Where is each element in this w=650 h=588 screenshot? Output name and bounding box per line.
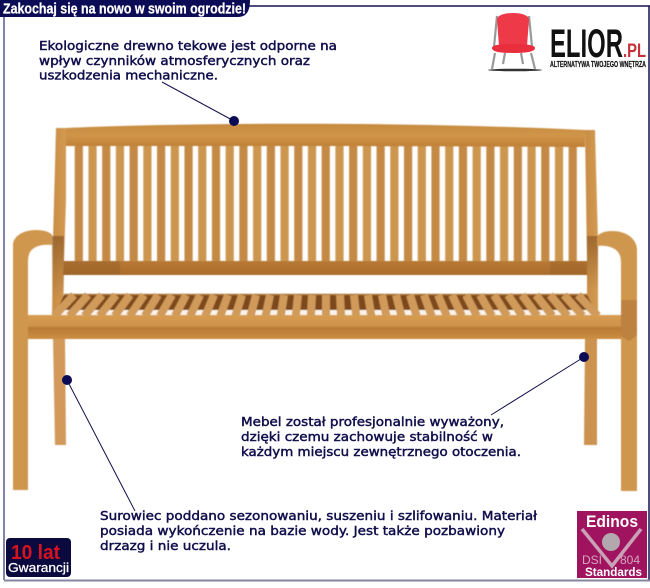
front seat rail [27, 315, 623, 339]
shadows beneath the arms [52, 236, 598, 300]
lower back rail [63, 261, 587, 275]
warranty label: Gwarancji [8, 561, 69, 575]
marker dot [579, 352, 589, 362]
right front leg shading [621, 300, 637, 341]
right arm and front leg [597, 231, 637, 491]
bench back legs [53, 338, 597, 445]
seat slats [54, 294, 598, 316]
badge: 10 years warranty [6, 538, 71, 577]
warranty years: 10 lat [11, 542, 60, 564]
top back rail [66, 124, 585, 147]
callout text: posiada wykończenie na bazie wody. Jest także pozbawiony [100, 523, 506, 538]
callout text: Mebel został profesjonalnie wyważony, [241, 414, 504, 429]
Standards label: Standards [585, 565, 642, 579]
callout text: Surowiec poddano sezonowaniu, suszeniu i szlifowaniu. Materiał [100, 508, 537, 523]
callout text: dzięki czemu zachowuje stabilność w [241, 429, 493, 444]
callout: material [62, 375, 537, 553]
leader line [67, 380, 135, 511]
DSI label: DSI [582, 553, 602, 567]
marker dot [62, 375, 72, 385]
bench illustration [13, 124, 637, 491]
logo: Elior.pl [488, 13, 646, 71]
left arm and front leg [13, 230, 52, 490]
marker dot [229, 116, 239, 126]
back slats [74, 145, 578, 263]
leader line [491, 357, 584, 415]
804 label: 804 [620, 553, 640, 567]
Edinos name: Edinos [586, 512, 638, 531]
badge: Edinos standards [577, 511, 647, 579]
callout: balance [241, 352, 589, 459]
callout text: Ekologiczne drewno tekowe jest odporne na [39, 38, 337, 53]
icon: red chair [488, 13, 542, 71]
back posts [52, 128, 598, 320]
callout text: uszkodzenia mechaniczne. [39, 68, 218, 82]
V mark with circle [582, 529, 641, 566]
title banner: Zakochaj się na nowo w swoim ogrodzie! [3, 2, 246, 18]
callout text: drzazg i nie uczula. [100, 538, 231, 553]
callout: top rail [39, 38, 337, 126]
callout text: każdym miejscu zewnętrznego otoczenia. [241, 444, 521, 459]
leader line [162, 82, 234, 121]
callout text: wpływ czynników atmosferycznych oraz [39, 53, 310, 68]
